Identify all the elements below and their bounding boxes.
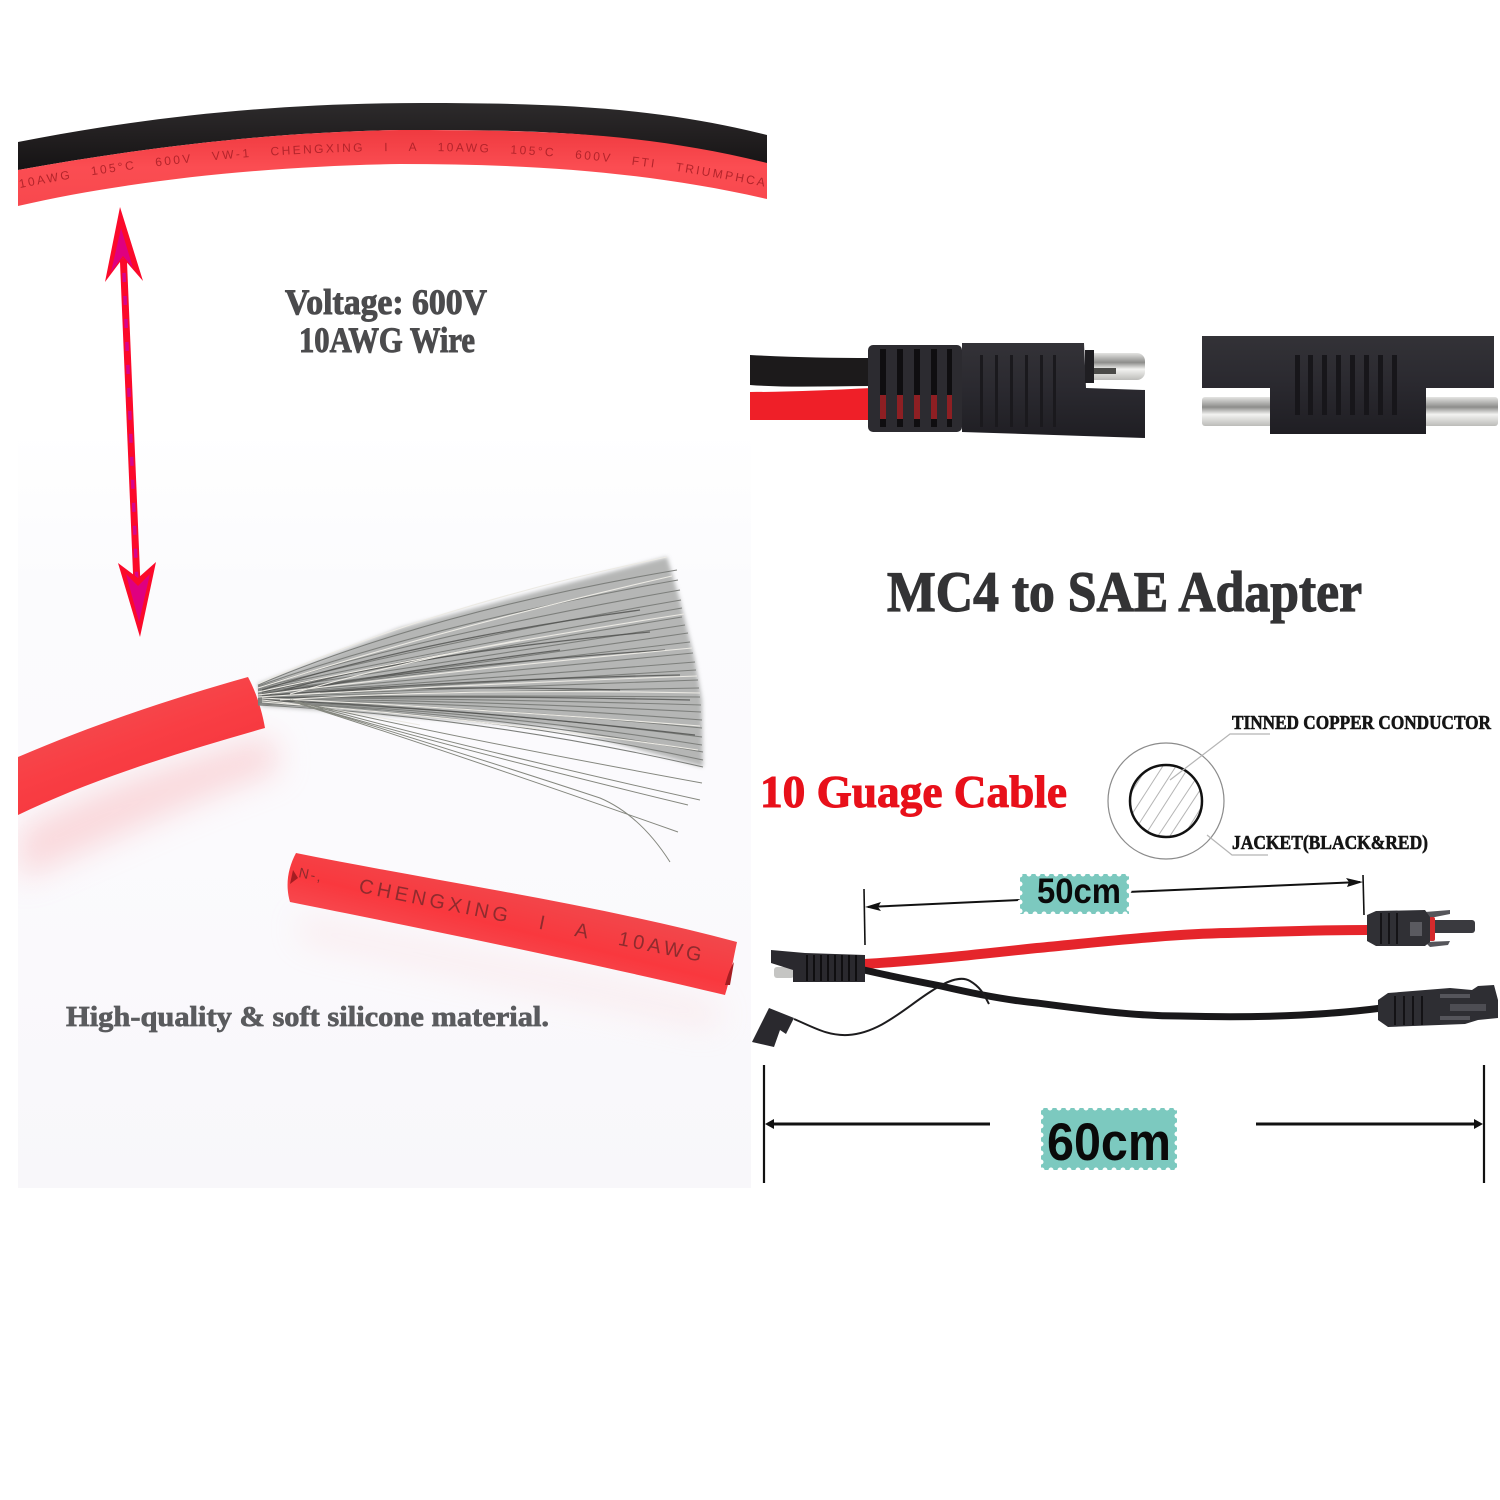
wire strands [258, 557, 703, 862]
photo: SAE connector left [750, 343, 1145, 438]
cable assembly: MC4 connector black [1378, 985, 1498, 1027]
dimension: 60cm: 60cm [1047, 1113, 1171, 1172]
dimension: 50cm [864, 872, 1364, 945]
photo: wire shadow glow [18, 735, 720, 1030]
panel: photo background [18, 440, 751, 1188]
photo: black and red twin cable [18, 103, 767, 206]
wire print: CHENGXING I A 10AWG [357, 875, 707, 967]
text: voltage and gauge [285, 282, 487, 360]
cable assembly: red wire [864, 930, 1368, 964]
dimension: 60cm [764, 1065, 1484, 1183]
caption: silicone material: High-quality & soft silicone material. [66, 1002, 549, 1033]
photo: short red wire piece [288, 853, 737, 995]
cable assembly: SAE plug [771, 950, 865, 982]
cable assembly: black wire [864, 970, 1382, 1017]
photo: SAE connector right [1202, 336, 1498, 434]
cable print: 10AWG 105°C 600V VW-1 CHENGXING I A 10AWG 105°C 600V FTI TRIUMPHCAB [20, 142, 764, 188]
photo: stripped red wire [18, 557, 703, 862]
text: voltage and gauge: 10AWG Wire [299, 320, 475, 360]
dimension: 50cm: 50cm [1037, 872, 1121, 911]
wire print fragment: N-, [297, 864, 325, 885]
heading: MC4 to SAE Adapter: MC4 to SAE Adapter [887, 561, 1362, 624]
text: voltage and gauge: Voltage: 600V [285, 282, 487, 322]
label: jacket: JACKET(BLACK&RED) [1232, 832, 1428, 854]
arrow: double-headed height marker [105, 207, 156, 637]
cable assembly: SAE dust cap and tether [752, 979, 989, 1047]
cable assembly: MC4 connector red [1367, 910, 1475, 947]
diagram: cable cross-section [1108, 734, 1270, 859]
heading: 10 Guage Cable: 10 Guage Cable [760, 767, 1067, 817]
